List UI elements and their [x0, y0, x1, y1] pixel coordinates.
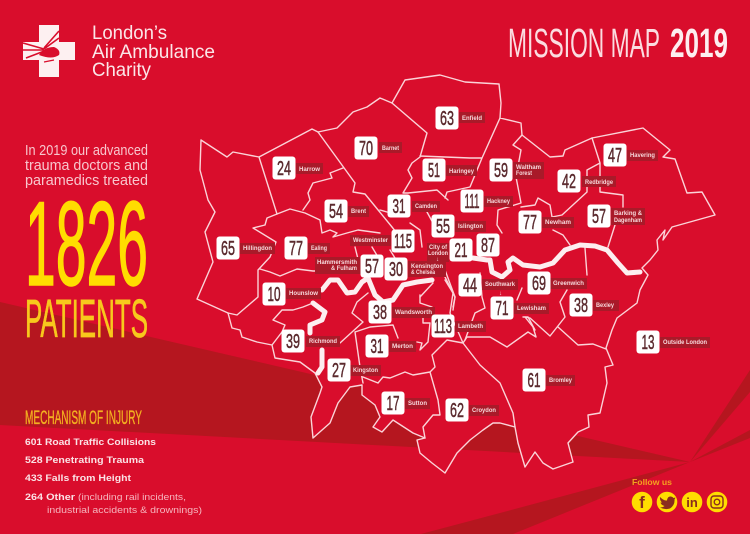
patient number boxes: 63 [440, 108, 454, 130]
patient number boxes: 115 [394, 231, 412, 253]
borough labels: Bromley [549, 378, 573, 384]
patient number boxes: 24 [277, 158, 291, 180]
logo wordmark: Charity [92, 59, 151, 81]
borough labels: Barnet [382, 146, 399, 152]
logo wordmark [92, 22, 215, 81]
icon: facebook: f [639, 493, 645, 512]
borough labels: Haringey [449, 169, 475, 175]
patient number boxes: 113 [434, 316, 452, 338]
borough labels: London [428, 251, 448, 257]
list: mechanisms of injury [25, 437, 202, 516]
patient number boxes: 77 [523, 212, 537, 234]
logo wordmark: London’s [92, 22, 167, 44]
borough labels: Croydon [472, 408, 496, 414]
text: PATIENTS [25, 289, 148, 349]
borough labels: Havering [630, 153, 655, 159]
patient number boxes: 21 [454, 240, 468, 262]
follow us heading: Follow us [632, 477, 672, 487]
logo: London's Air Ambulance Charity [23, 22, 215, 81]
borough labels: Ealing [311, 246, 327, 252]
borough labels: Sutton [408, 401, 427, 407]
patient number boxes: 62 [450, 400, 464, 422]
patient number boxes: 38 [574, 295, 588, 317]
patient number boxes [216, 106, 660, 422]
borough labels: Brent [351, 209, 366, 215]
patient number boxes: 31 [392, 196, 406, 218]
patient number boxes: 51 [428, 160, 440, 182]
borough labels: ↓ [436, 257, 439, 263]
borough labels: Hounslow [289, 291, 318, 297]
list: mechanisms of injury: industrial accidents & drownings) [47, 505, 202, 516]
icon: twitter [657, 492, 677, 512]
borough labels: Hillingdon [243, 246, 272, 252]
patient number boxes: 39 [286, 331, 300, 353]
borough labels: Harrow [299, 167, 320, 173]
borough labels: Enfield [462, 116, 482, 122]
list: mechanisms of injury: (including rail incidents, [78, 492, 186, 503]
patient number boxes: 10 [268, 284, 280, 306]
patient number boxes: 87 [481, 235, 495, 257]
patient number boxes: 47 [608, 145, 622, 167]
patient number boxes: 38 [373, 302, 387, 324]
patient number boxes: 42 [562, 171, 576, 193]
patient number boxes: 31 [370, 336, 384, 358]
borough labels: ↓ [499, 291, 502, 297]
borough boundaries [228, 103, 623, 438]
borough labels: Greenwich [553, 281, 584, 287]
borough labels: Southwark [485, 282, 516, 288]
borough labels: City of [429, 245, 448, 251]
patient number boxes: 65 [221, 238, 235, 260]
intro text: paramedics treated [25, 172, 148, 189]
patient number boxes: 71 [496, 298, 508, 320]
map of London boroughs [197, 75, 715, 473]
borough labels [240, 112, 710, 416]
borough labels: Bexley [596, 303, 615, 309]
borough labels: Redbridge [585, 180, 614, 186]
patient number boxes: 44 [463, 275, 477, 297]
borough labels: Outside London [663, 340, 707, 346]
patient number boxes: 13 [642, 332, 654, 354]
patient number boxes: 30 [389, 259, 403, 281]
patient number boxes: 70 [359, 138, 373, 160]
patient number boxes: 61 [528, 370, 540, 392]
borough labels: Richmond [309, 339, 337, 345]
borough labels: Lewisham [517, 306, 546, 312]
heading: mechanism of injury: MECHANISM OF INJURY [25, 407, 142, 429]
list: mechanisms of injury: 528 Penetrating Trauma [25, 455, 145, 466]
borough labels: Hammersmith [317, 260, 357, 266]
borough labels: Camden [415, 204, 437, 210]
borough labels: Newham [545, 220, 571, 226]
icon: instagram [707, 492, 727, 512]
borough labels: Waltham [516, 165, 541, 171]
borough labels: Lambeth [458, 324, 483, 330]
borough labels: Wandsworth [395, 310, 432, 316]
patient number boxes: 77 [289, 238, 303, 260]
patient number boxes: 69 [532, 273, 546, 295]
borough labels: Westminster [353, 238, 389, 244]
borough labels: Hackney [487, 199, 511, 205]
text: 1826 [25, 177, 148, 311]
patient number boxes: 59 [494, 160, 508, 182]
patient number boxes: 111 [464, 191, 480, 213]
patient number boxes: 17 [386, 393, 400, 415]
logo wordmark: Air Ambulance [92, 41, 215, 63]
icon: linkedin: in [686, 495, 698, 510]
borough labels: Kingston [353, 368, 378, 374]
borough labels: Dagenham [614, 218, 642, 224]
map outline [197, 75, 715, 473]
borough labels: & Fulham [331, 266, 357, 272]
River Thames [310, 245, 640, 373]
list: mechanisms of injury: 264 Other [25, 492, 75, 503]
patient number boxes: 57 [365, 256, 379, 278]
intro text: In 2019 our advanced [25, 142, 148, 159]
borough labels: Forest [516, 171, 532, 177]
patient number boxes: 57 [592, 206, 606, 228]
patient number boxes: 55 [436, 216, 450, 238]
patient number boxes: 27 [332, 360, 346, 382]
follow us [632, 477, 727, 512]
list: mechanisms of injury: 433 Falls from Height [25, 473, 132, 484]
intro text: trauma doctors and [25, 157, 148, 174]
background dark wedges [0, 302, 750, 534]
icon: cross with helicopter [23, 25, 75, 77]
borough labels: & Chelsea [411, 270, 436, 276]
borough labels: Barking & [614, 211, 643, 217]
patient number boxes: 54 [329, 201, 343, 223]
borough labels: Islington [458, 224, 483, 230]
list: mechanisms of injury: 601 Road Traffic Collisions [25, 437, 156, 448]
borough labels: Merton [392, 344, 413, 350]
borough labels: Kensington [411, 264, 443, 270]
intro text [25, 142, 148, 189]
